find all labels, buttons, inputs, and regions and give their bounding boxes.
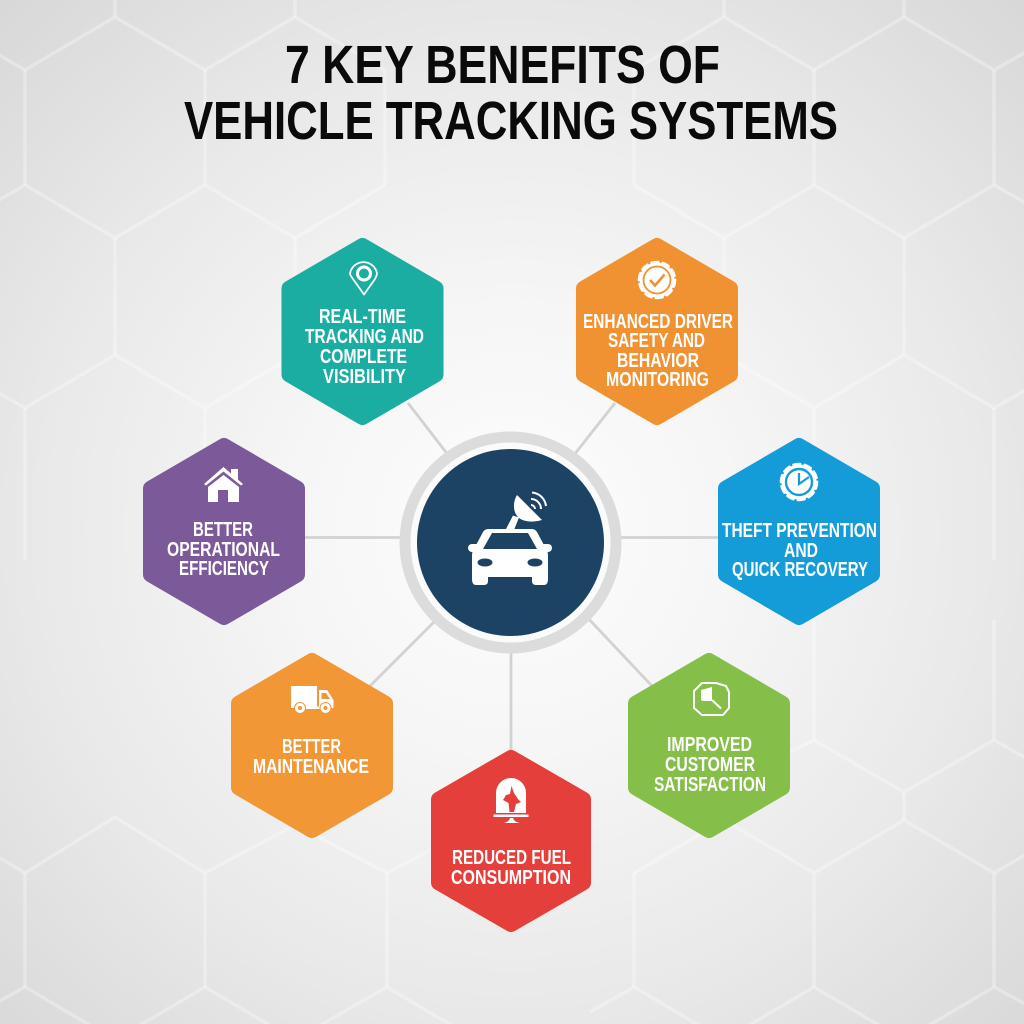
icon: car: [468, 516, 552, 585]
icon: alarm dome: [494, 778, 528, 823]
connector lines: [300, 403, 722, 754]
panel: theft prevention: AND: [784, 540, 818, 562]
icon: location pin: [350, 262, 377, 294]
title: VEHICLE TRACKING SYSTEMS: [184, 91, 838, 151]
icon: clock badge: [781, 464, 817, 500]
panel: theft prevention: QUICK RECOVERY: [732, 559, 868, 581]
icon: magnifier frame: [694, 683, 729, 715]
panel: driver safety: BEHAVIOR: [617, 350, 699, 372]
panel: real-time tracking: REAL-TIME: [319, 306, 406, 328]
panel: real-time tracking: [290, 246, 436, 417]
panel: driver safety: MONITORING: [606, 369, 709, 391]
icon: truck: [291, 686, 334, 714]
icon: check badge: [639, 262, 675, 298]
panel: customer satisfaction: SATISFACTION: [654, 774, 766, 796]
panel: operational efficiency: OPERATIONAL: [167, 539, 280, 561]
panel: reduced fuel: CONSUMPTION: [451, 867, 571, 889]
panel: operational efficiency: EFFICIENCY: [179, 558, 269, 580]
icon: satellite dish: [514, 492, 546, 522]
panel: better maintenance: MAINTENANCE: [253, 756, 369, 778]
panel: reduced fuel: REDUCED FUEL: [452, 847, 571, 869]
panel: customer satisfaction: IMPROVED: [667, 734, 752, 756]
panel: theft prevention: [722, 446, 877, 617]
panel: customer satisfaction: [636, 661, 782, 830]
panel: real-time tracking: COMPLETE: [320, 346, 407, 368]
panel: better maintenance: BETTER: [282, 736, 341, 758]
panel: better maintenance: [239, 661, 385, 830]
panel: driver safety: [583, 246, 733, 417]
panel: theft prevention: THEFT PREVENTION: [722, 520, 877, 542]
panel: real-time tracking: TRACKING AND: [305, 326, 424, 348]
panel: reduced fuel: [439, 758, 583, 924]
central hub: car with satellite dish: [400, 432, 622, 654]
title: [184, 35, 838, 151]
panel: real-time tracking: VISIBILITY: [323, 366, 407, 388]
panel: operational efficiency: BETTER: [193, 519, 253, 541]
panel: customer satisfaction: CUSTOMER: [665, 754, 755, 776]
icon: house: [204, 467, 243, 502]
panel: driver safety: SAFETY AND: [608, 330, 705, 352]
panel: driver safety: ENHANCED DRIVER: [583, 311, 733, 333]
title: 7 KEY BENEFITS OF: [285, 35, 720, 95]
panel: operational efficiency: [151, 446, 297, 617]
